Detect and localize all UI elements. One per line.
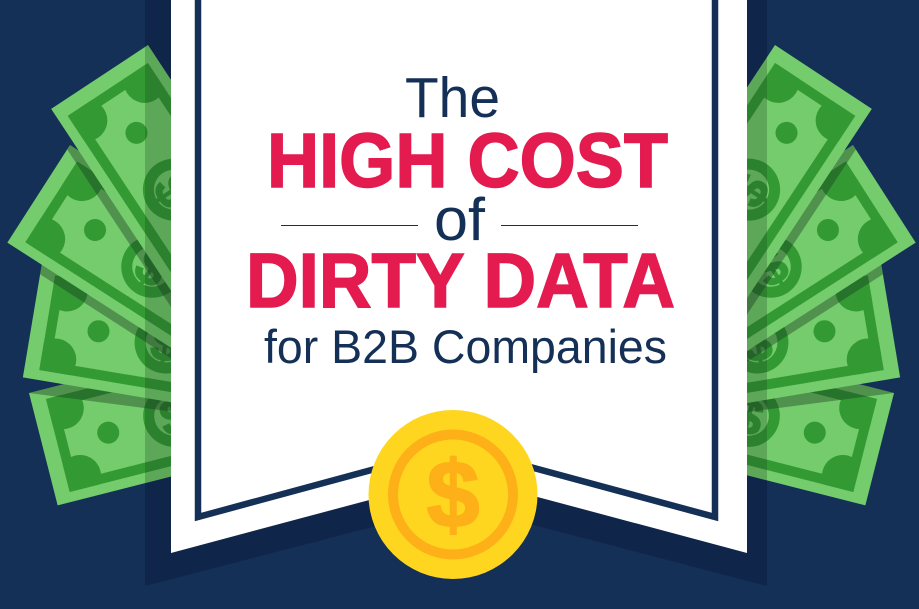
title: for B2B Companies: for B2B Companies (264, 320, 667, 373)
bill: right bottom: $ (728, 386, 769, 447)
bill: left second (7, 145, 297, 388)
divider left (281, 225, 418, 226)
bill: right third: $ (739, 314, 776, 373)
bill: right top (626, 45, 872, 334)
divider right (501, 225, 638, 226)
bill: left bottom: $ (154, 386, 195, 447)
money fan: right (747, 45, 916, 506)
title: HIGH COST: HIGH COST (267, 118, 668, 204)
bill: left third (23, 263, 308, 422)
white banner (171, 0, 747, 553)
banner inner navy border (198, 0, 715, 517)
bill: left second: $ (125, 237, 179, 299)
bill shadow on right third bill (747, 265, 883, 362)
money fan: left (7, 45, 171, 506)
bill: left bottom (29, 326, 319, 505)
title: The: The (405, 66, 500, 130)
bill: right bottom (604, 326, 894, 505)
icon: gold coin: $ (427, 442, 479, 548)
bill: left top: $ (142, 163, 204, 217)
bill: left third: $ (147, 314, 184, 373)
bill: left top (51, 45, 297, 334)
bill shadow on right bottom bill (748, 384, 894, 412)
icon: gold coin (368, 410, 538, 579)
title: DIRTY DATA: DIRTY DATA (246, 238, 675, 324)
banner shadow over left bills (145, 45, 171, 483)
title: of: of (434, 186, 485, 253)
banner shadow (145, 0, 767, 586)
bill shadow on bottom bill (30, 384, 171, 412)
bill: right second: $ (744, 236, 798, 299)
bill: right top: $ (719, 163, 781, 217)
title (246, 66, 675, 373)
bill shadow on second bill (67, 145, 171, 307)
bill shadow on third bill (40, 265, 171, 358)
banner shadow over right bills (747, 58, 767, 480)
bill: right third (615, 263, 900, 422)
bill shadow on right second bill (747, 145, 856, 314)
bill: right second (626, 145, 916, 388)
